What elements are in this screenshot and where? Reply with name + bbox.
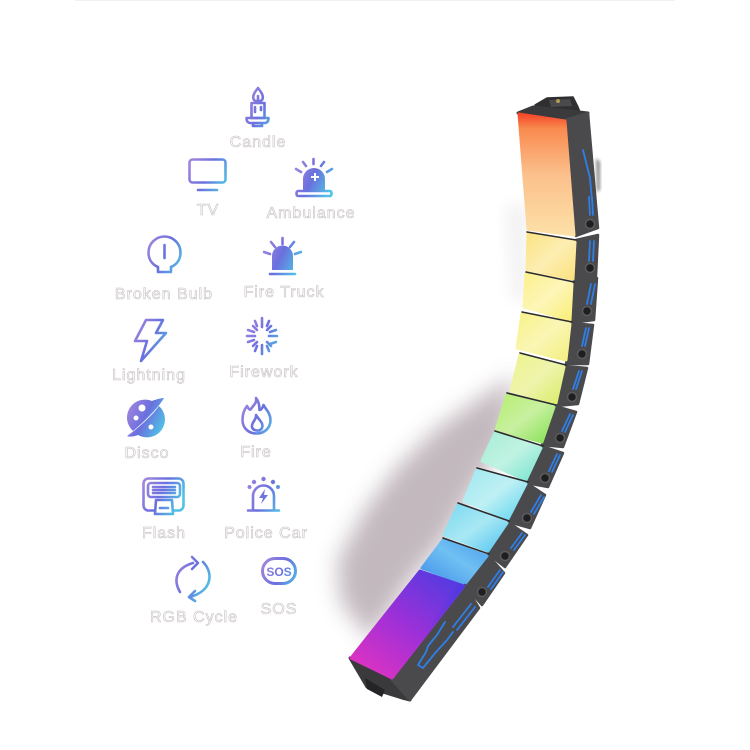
label: Police Car: Police Car	[224, 525, 308, 542]
icon: candle	[246, 88, 268, 126]
icon: fire truck siren	[264, 238, 301, 274]
segment 2	[524, 272, 597, 323]
icon: flash screen	[144, 478, 184, 514]
segment 8	[444, 503, 527, 567]
label: Fire Truck: Fire Truck	[243, 284, 325, 301]
icon: TV	[190, 160, 226, 190]
label: Firework: Firework	[229, 364, 299, 381]
label: SOS: SOS	[261, 601, 297, 618]
segment 1	[527, 232, 598, 281]
icon: broken bulb	[148, 236, 180, 272]
segment 7	[464, 468, 545, 528]
icon: disco planet	[127, 398, 165, 437]
icon: SOS badge: SOS	[266, 565, 292, 579]
icon: RGB cycle arrows	[176, 557, 210, 601]
light bar device	[350, 97, 598, 700]
label: Candle: Candle	[230, 134, 286, 151]
label: RGB Cycle: RGB Cycle	[150, 609, 238, 626]
label: Disco: Disco	[124, 445, 170, 462]
segment: bottom purple block	[350, 571, 479, 700]
segment 9	[422, 538, 504, 605]
icon: ambulance siren	[296, 159, 332, 196]
mode labels	[112, 134, 356, 626]
end cap connector	[535, 97, 580, 113]
icon: lightning	[135, 320, 166, 361]
label: Broken Bulb: Broken Bulb	[115, 286, 213, 303]
segment 4	[511, 353, 587, 406]
label: Ambulance: Ambulance	[266, 205, 356, 222]
device shadow	[338, 158, 600, 640]
label: Flash: Flash	[142, 525, 186, 542]
segment 6	[482, 431, 563, 487]
label: TV: TV	[197, 202, 219, 219]
icon: SOS badge	[262, 558, 296, 584]
segment 5	[496, 393, 576, 447]
label: Fire: Fire	[240, 444, 272, 461]
icon: firework	[247, 318, 277, 354]
icon: police car siren	[248, 477, 280, 510]
label: Lightning: Lightning	[112, 367, 186, 384]
segment: top orange block	[518, 107, 598, 236]
segment 3	[517, 312, 593, 364]
icon: fire	[242, 398, 270, 434]
